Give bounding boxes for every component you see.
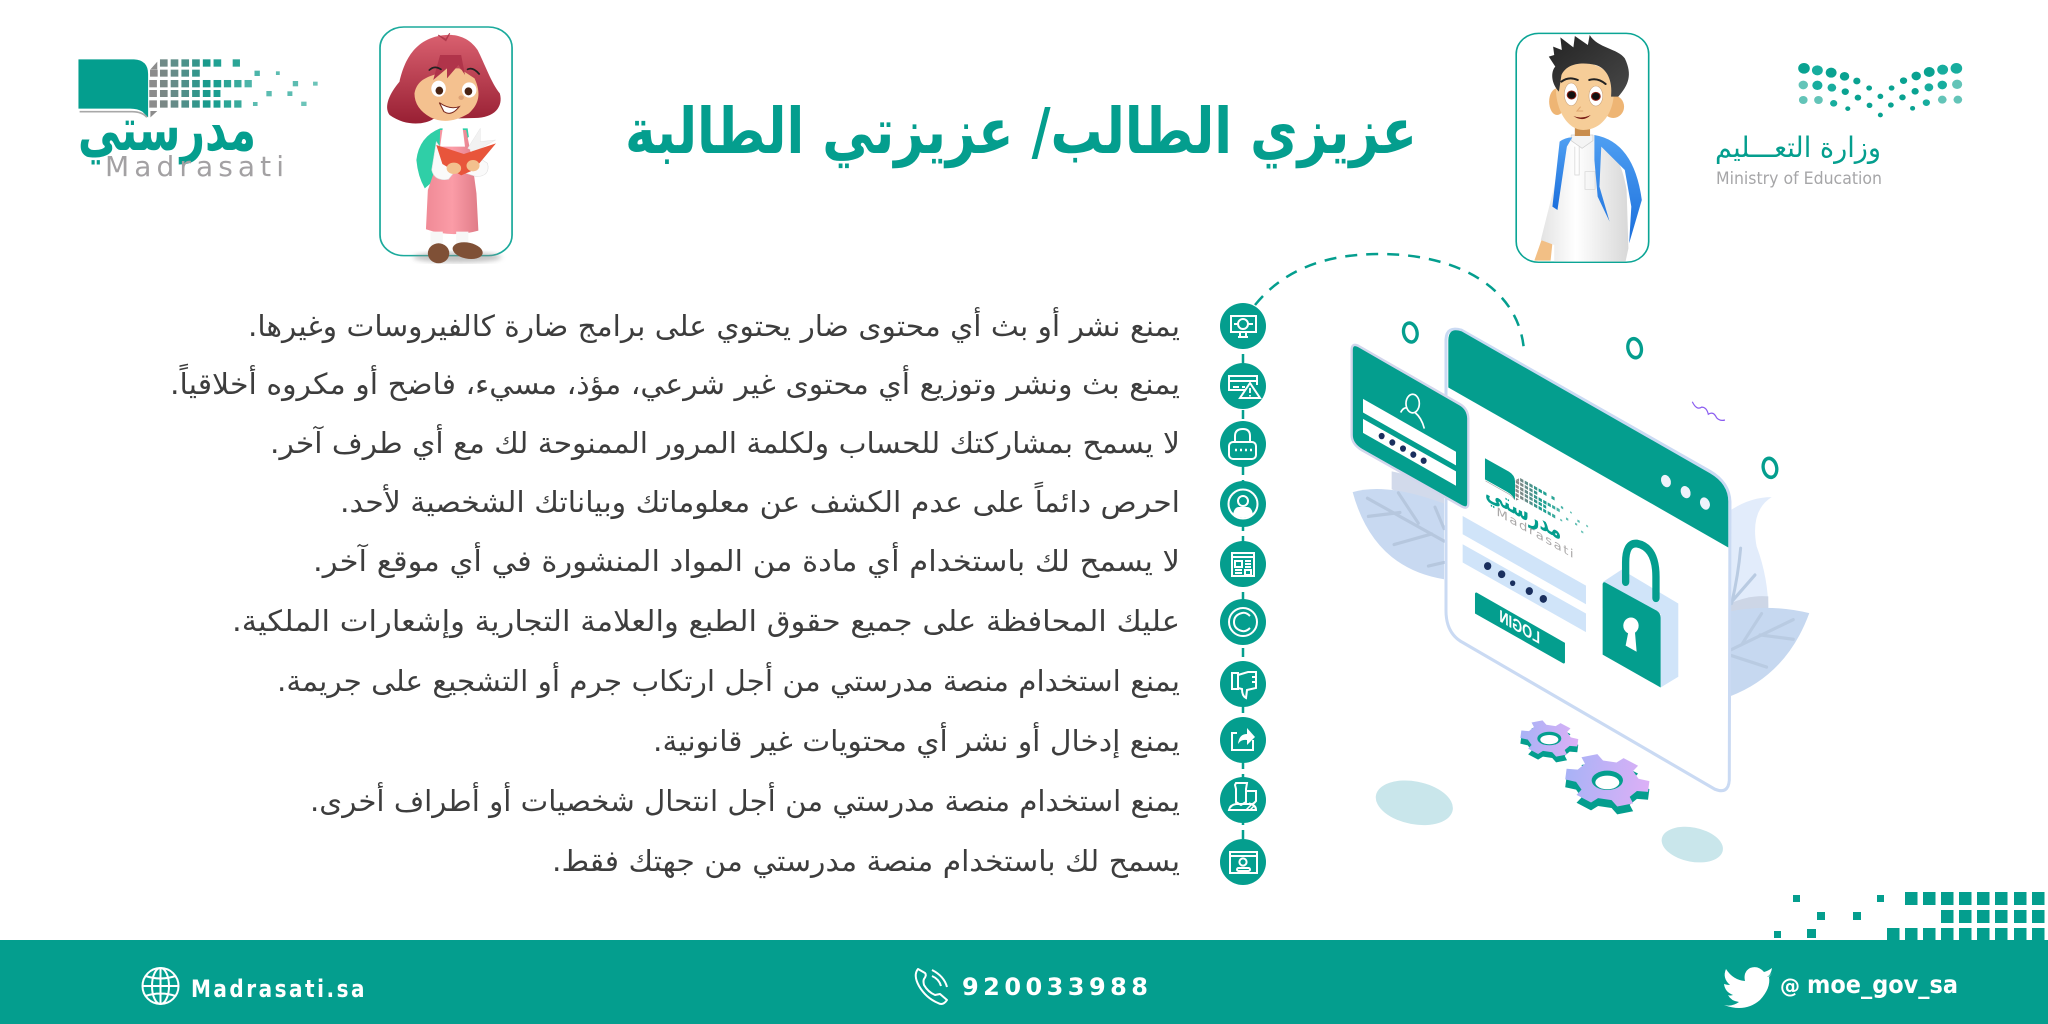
small user card [1352,345,1468,508]
logo text: English: Ministry of Education [1716,169,1882,189]
boy ears [1549,88,1565,115]
girl dress [426,130,478,234]
girl legs and shoes [431,232,443,247]
icon: bird [1724,967,1773,1008]
gear large [1563,750,1652,819]
girl hands [447,163,461,174]
boy frame [1516,33,1649,262]
dashed arc connector [1255,254,1524,351]
dashed timeline line [1242,326,1244,862]
rule 3: لا يسمح بمشاركتك للحساب ولكلمة المرور الممنوحة لك مع أي طرف آخر. [270,423,1180,460]
icon: virus monitor [1220,303,1266,349]
mini logo Latin wordmark: Madrasati [1497,506,1574,562]
logo text: Arabic: وزارة التعـــليم [1715,131,1881,164]
mini logo [1485,458,1588,570]
rule 9: يمنع استخدام منصة مدرستي من أجل انتحال شخصيات أو أطراف أخرى. [310,781,1180,819]
window header [1448,330,1728,547]
icon: card warning [1220,363,1266,409]
pixel decoration bottom right [1774,892,2044,940]
website text: Madrasati.sa [191,975,367,1003]
logo pixel grid [149,59,318,108]
boy hair [1549,35,1629,97]
gear small [1519,717,1580,765]
window body [1446,329,1730,791]
icon: phone [916,969,947,1004]
logo book [78,59,148,117]
rule 7: يمنع استخدام منصة مدرستي من أجل ارتكاب جرم أو التشجيع على جريمة. [277,661,1180,699]
icon: copyright [1220,599,1266,645]
footer: phone [916,969,1148,1004]
icon: article page [1220,541,1266,587]
rule 1: يمنع نشر أو بث أي محتوى ضار يحتوي على برامج ضارة كالفيروسات وغيرها. [248,306,1180,343]
icon: browser profile [1220,839,1266,885]
mini logo mark [1485,458,1588,541]
login button [1475,593,1565,663]
boy backpack straps [1552,137,1572,210]
rule 4: احرص دائماً على عدم الكشف عن معلوماتك وبياناتك الشخصية لأحد. [340,482,1180,519]
logo: Madrasati [78,59,318,117]
logo dots [1798,63,1962,117]
login button: LOGIN [1499,606,1540,648]
handle text: moe_gov_sa [1807,970,1958,999]
boy mouth [1573,115,1591,119]
right leaf [1730,497,1809,696]
user glyph [1401,394,1424,429]
logo wordmark: Latin: Madrasati [105,150,284,183]
girl mouth [439,103,459,113]
girl sleeves [432,142,488,180]
password dots [1484,562,1547,603]
girl face [414,68,478,121]
icon: impersonation masks [1220,777,1266,823]
boy neck [1575,123,1590,136]
boy eyes [1564,83,1578,106]
rule 8: يمنع إدخال أو نشر أي محتويات غير قانونية. [653,721,1180,759]
logo wordmark: Arabic: مدرستي [78,95,256,165]
boy face [1556,63,1614,130]
decorative rings [1402,321,1779,479]
rule 5: لا يسمح لك باستخدام أي مادة من المواد المنشورة في أي موقع آخر. [313,541,1180,579]
login fields [1463,516,1586,604]
character card: girl [380,27,512,263]
phone number: 920033988 [962,973,1148,1001]
icon: share [1220,717,1266,763]
rule 2: يمنع بث ونشر وتوزيع أي محتوى غير شرعي، مؤذ، مسيء، فاضح أو مكروه أخلاقياً. [170,364,1180,402]
purple squiggle [1692,402,1725,420]
logo: Ministry of Education [1798,63,1962,117]
footer: twitter [1724,967,1958,1008]
title: عزيزي الطالب/ عزيزتي الطالبة [625,95,1417,168]
footer bar [0,940,2048,1024]
icon: globe [142,968,178,1004]
rule 10: يسمح لك باستخدام منصة مدرستي من جهتك فقط. [552,844,1180,879]
girl book [468,128,496,152]
icon: user circle [1220,481,1266,527]
illustration: login window [1352,321,1809,867]
padlock [1603,544,1678,687]
rules list [170,306,1180,879]
girl backpack [416,128,469,188]
icon: thumbs down [1220,661,1266,707]
window dots [1659,473,1712,512]
boy thobe [1541,135,1628,262]
girl frame [380,27,512,256]
girl eyes [431,81,446,97]
footer: website [142,968,367,1004]
rule 6: عليك المحافظة على جميع حقوق الطبع والعلامة التجارية وإشعارات الملكية. [232,604,1180,639]
character card: boy [1516,33,1649,262]
floor blobs [1372,774,1456,831]
girl hair [387,35,501,124]
handle at sign: @ [1780,974,1800,998]
left leaf [1353,471,1444,579]
mini logo Arabic wordmark: مدرستي [1485,477,1561,546]
boy hands [1534,240,1627,261]
icon: padlock [1220,421,1266,467]
